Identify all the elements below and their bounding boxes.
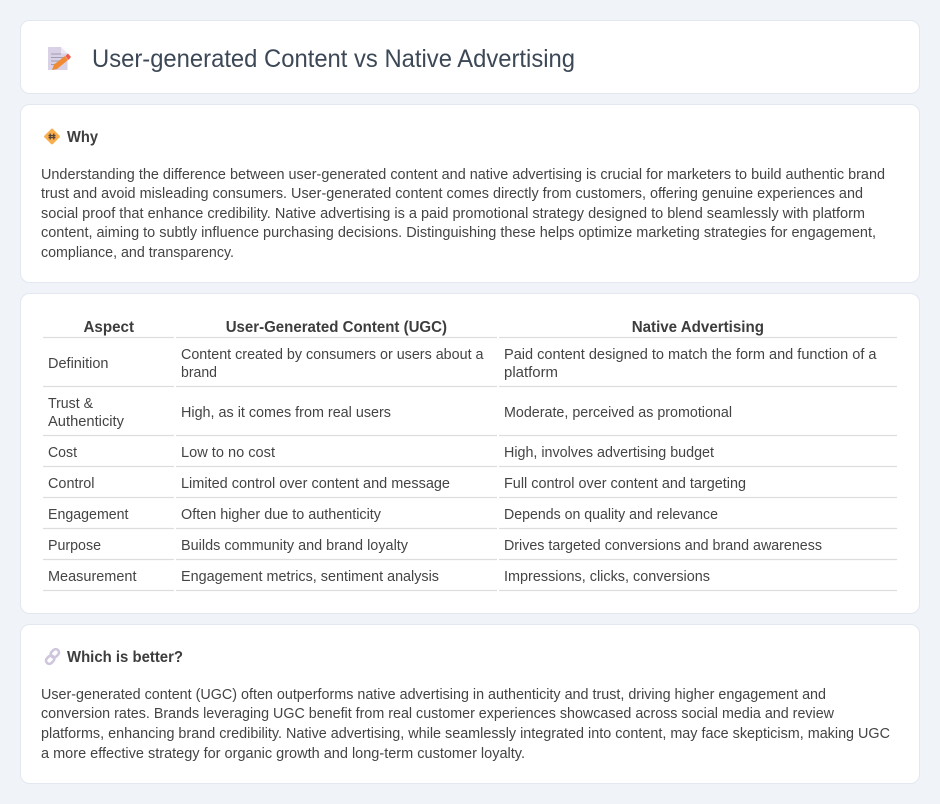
row: trust and authenticity: Trust & (48, 396, 93, 412)
row: cost (48, 445, 714, 461)
text block: which is better paragraph: a more effective strategy for organic growth and long-term customer loyalty. (41, 746, 525, 762)
icon: chain link (45, 648, 60, 665)
row: engagement: Often higher due to authenticity (181, 507, 382, 523)
row: control (48, 476, 746, 492)
table header row: Aspect (84, 319, 134, 336)
row: engagement (48, 507, 718, 523)
row: purpose: Purpose (48, 538, 101, 554)
row: control: Full control over content and targeting (504, 476, 746, 492)
heading: why: Why (67, 129, 98, 146)
row: definition: brand (181, 365, 217, 381)
panel: comparison table (20, 294, 920, 614)
panel: header (20, 20, 920, 94)
row: control: Limited control over content and message (181, 476, 450, 492)
row: engagement: Engagement (48, 507, 128, 523)
row: definition: platform (504, 365, 558, 381)
row: definition (48, 347, 877, 381)
panel: which is better (20, 624, 920, 784)
text block: why paragraph: trust and avoid misleading consumers. User-generated content comes directly from customers, offering genuine experiences and (41, 186, 863, 202)
row: definition: Paid content designed to match the form and function of a (504, 347, 877, 363)
text block: why paragraph: compliance, and transparency. (41, 245, 234, 261)
text block: why paragraph: Understanding the difference between user-generated content and native advertising is crucial for marketers to build authentic brand (41, 167, 885, 183)
row: definition: Definition (48, 356, 108, 372)
icon: orange warning diamond (44, 128, 60, 145)
row: trust and authenticity: Moderate, perceived as promotional (504, 405, 732, 421)
text block: which is better paragraph: platforms, enhancing brand credibility. Native advertising, while seamlessly integrated into content, may face skepticism, making UGC (41, 726, 890, 742)
row: definition: Content created by consumers or users about a (181, 347, 484, 363)
text block: why paragraph (41, 167, 885, 261)
row: trust and authenticity: Authenticity (48, 414, 125, 430)
text block: which is better paragraph: User-generated content (UGC) often outperforms native advertising in authenticity and trust, driving higher engagement and (41, 687, 826, 703)
table header row: User-Generated Content (UGC) (226, 319, 447, 336)
row: control: Control (48, 476, 94, 492)
text block: why paragraph: content, aiming to subtly influence purchasing decisions. Distinguishing these helps optimize marketing strategies for engagement, (41, 225, 876, 241)
heading: which is better: Which is better? (67, 649, 183, 666)
row: purpose: Drives targeted conversions and brand awareness (504, 538, 822, 554)
row: measurement: Measurement (48, 569, 136, 585)
text block: why paragraph: social proof that enhance credibility. Native advertising is a paid promotional strategy designed to blend seamlessly with platform (41, 206, 865, 222)
icon: memo and pencil (48, 47, 71, 70)
row: purpose: Builds community and brand loyalty (181, 538, 409, 554)
row: trust and authenticity: High, as it comes from real users (181, 405, 391, 421)
row: purpose (48, 538, 822, 554)
table header row (84, 319, 764, 336)
row: engagement: Depends on quality and relevance (504, 507, 718, 523)
panel: why (20, 104, 920, 282)
table header row: Native Advertising (632, 319, 764, 336)
row: cost: Cost (48, 445, 77, 461)
row: measurement (48, 569, 710, 585)
row: measurement: Engagement metrics, sentiment analysis (181, 569, 439, 585)
row: cost: Low to no cost (181, 445, 275, 461)
text block: which is better paragraph (41, 687, 890, 762)
row: measurement: Impressions, clicks, conversions (504, 569, 710, 585)
row: cost: High, involves advertising budget (504, 445, 714, 461)
text block: which is better paragraph: conversion rates. Brands leveraging UGC benefit from real customer experiences showcased across social media and review (41, 706, 834, 722)
row: trust and authenticity (48, 396, 732, 430)
title: User-generated Content vs Native Advertising (92, 45, 575, 73)
